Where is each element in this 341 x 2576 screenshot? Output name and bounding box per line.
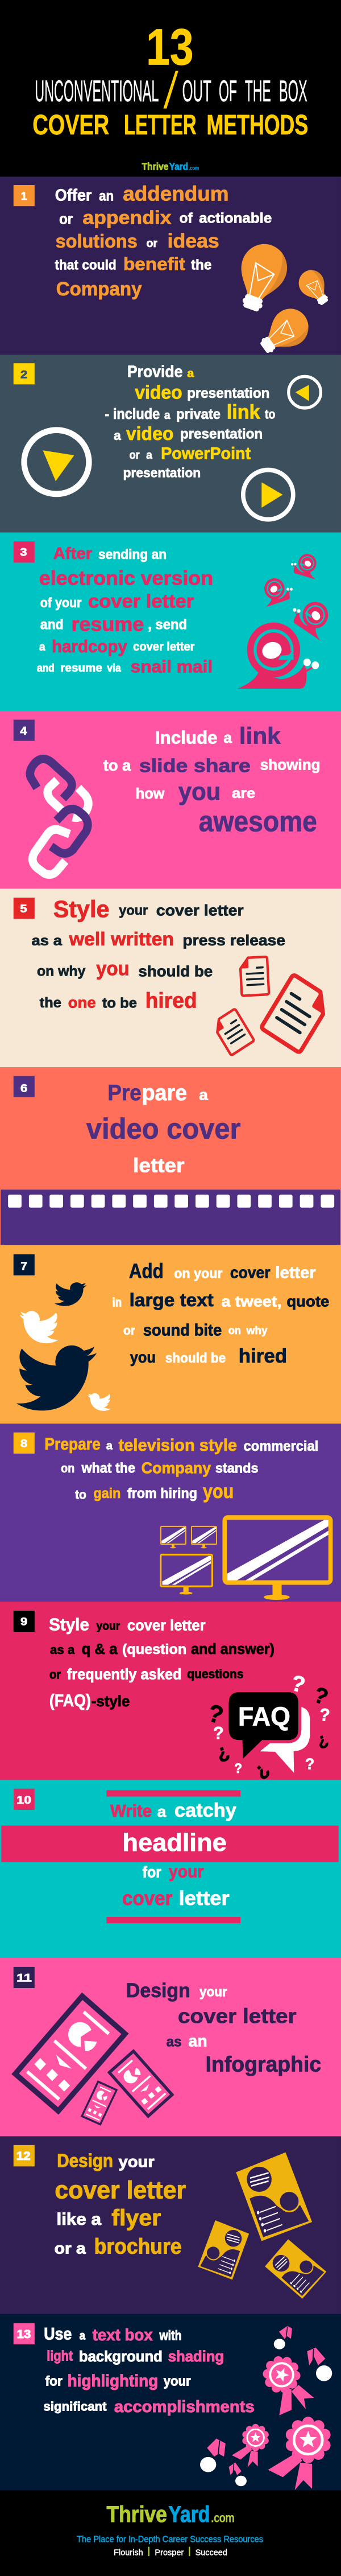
number badge 13 (14, 2323, 35, 2344)
text block 5: well written (69, 928, 174, 949)
text block 10: cover (122, 1888, 172, 1910)
title line: cover letter methods: METHODS (207, 109, 308, 141)
text block 10: headline (122, 1829, 227, 1857)
icon: medium television (161, 1554, 212, 1594)
icon: middle snail (287, 593, 336, 640)
text block 5: the (40, 995, 61, 1011)
text block 6: Pre (107, 1081, 142, 1105)
text block 6: video cover (86, 1113, 241, 1145)
text block 3 (37, 544, 213, 677)
icon: left flyer (197, 2220, 249, 2279)
text block 7: Add (129, 1260, 164, 1283)
text block 7: on your (174, 1266, 222, 1281)
title line: unconventional / out of the box: OUT (182, 75, 211, 108)
number badge 12 (14, 2145, 35, 2166)
title line: unconventional / out of the box: THE (245, 75, 271, 108)
bottom rule (106, 1917, 240, 1923)
icon: rosette large (268, 2417, 331, 2490)
text block 1: Offer (55, 186, 92, 204)
panel: header (0, 0, 341, 178)
text block 6: pare (142, 1081, 187, 1105)
icon: right flyer (259, 2231, 332, 2307)
text block 4: awesome (199, 805, 317, 838)
text block 1: an (99, 188, 114, 204)
number badge 10 (14, 1789, 35, 1810)
text block 4 (103, 722, 321, 838)
text block 5: hired (145, 988, 197, 1013)
text block 5: one (68, 995, 96, 1011)
text block 3: sending an (98, 546, 167, 562)
text block 5 (31, 896, 285, 1013)
text block 5: cover letter (156, 902, 244, 919)
text block 4: how (136, 786, 164, 802)
text block 3: resume (72, 614, 144, 635)
text block 8: on (61, 1460, 74, 1475)
header logo (142, 161, 199, 172)
icon: medium light bulb (253, 301, 315, 363)
text block 3: snail mail (131, 657, 213, 677)
text block 7: sound bite (143, 1321, 222, 1339)
text block 4: Include (155, 727, 218, 748)
text block 4: a (223, 730, 232, 746)
text block 8: to (75, 1487, 86, 1502)
text block 4: slide share (139, 755, 251, 776)
text block 11: as (167, 2034, 182, 2050)
title line: cover letter methods: COVER (32, 109, 109, 141)
icon: question marks: ? (305, 1755, 314, 1773)
icon: small document (240, 957, 269, 996)
panel: method 6 (0, 1067, 341, 1247)
header logo: Yard (169, 161, 188, 172)
text block 3: and (40, 617, 64, 633)
top rule (106, 1790, 240, 1797)
text block 13: Use (44, 2324, 72, 2343)
text block 13: accomplishments (114, 2398, 255, 2416)
number badge 9 (14, 1611, 35, 1632)
title line: cover letter methods (32, 109, 308, 141)
panel: method 7 (0, 1245, 341, 1425)
text block 9: (question (122, 1641, 186, 1657)
text block 2: a (187, 367, 194, 380)
text block 9: questions (187, 1666, 244, 1681)
text block 5: should be (138, 964, 213, 980)
text block 3: of your (40, 595, 81, 610)
text block 5: on why (37, 964, 86, 980)
text block 2: presentation (123, 466, 201, 480)
number badge 5: 5 (20, 903, 27, 915)
number badge 1 (14, 185, 35, 206)
number badge 13: 13 (16, 2328, 31, 2342)
panel: method 8 (0, 1423, 341, 1604)
text block 13: light (47, 2348, 73, 2364)
text block 3: , send (148, 617, 187, 633)
icon: question marks: ? (234, 1761, 242, 1776)
text block 7: why (246, 1324, 268, 1337)
text block 10: your (169, 1862, 204, 1882)
text block 13: for (45, 2374, 63, 2389)
text block 5: you (96, 958, 130, 980)
icon: question marks: ? (315, 1731, 331, 1752)
number badge 8: 8 (20, 1437, 27, 1450)
text block 8: commercial (244, 1439, 318, 1454)
icon: question marks: ? (319, 1705, 331, 1725)
text block 9 (49, 1615, 275, 1710)
text block 8: a (106, 1439, 113, 1452)
footer (0, 2490, 341, 2576)
text block 8: what the (81, 1460, 135, 1476)
text block 1: appendix (82, 207, 172, 228)
text block 7: quote (286, 1294, 329, 1310)
icon: medal 4 (229, 2463, 247, 2486)
number badge 6: 6 (20, 1082, 27, 1095)
icon: forward play button (243, 470, 293, 520)
text block 5: to be (102, 995, 137, 1011)
icon: left snail (259, 574, 296, 607)
icon: rosette small (232, 2424, 269, 2467)
text block 8 (44, 1435, 318, 1503)
text block 7: large text (130, 1289, 214, 1310)
text block 2: - include (105, 406, 160, 422)
text block 10: letter (179, 1887, 230, 1910)
icon: question marks: ? (251, 1759, 275, 1784)
text block 1: ideas (168, 230, 219, 252)
icon: top snail (289, 551, 321, 579)
number badge 5 (14, 898, 35, 919)
text block 3: a (39, 641, 45, 653)
text block 13: text box (93, 2326, 153, 2344)
icon: question marks: ? (289, 1670, 307, 1698)
text block 2: PowerPoint (161, 445, 251, 463)
text block 13: with (159, 2328, 182, 2343)
icon: question marks: ? (310, 1682, 331, 1710)
icon: question marks: ? (214, 1742, 232, 1767)
icon: question marks: ? (213, 1723, 224, 1743)
text block 7: cover (230, 1264, 271, 1282)
text block 7 (112, 1260, 329, 1367)
icon: medal 2 (307, 2348, 332, 2381)
text block 9: or (49, 1667, 61, 1681)
text block 13: background (79, 2348, 163, 2365)
icon: small light bulb (294, 265, 335, 311)
text block 12: Design (57, 2150, 113, 2171)
number badge 7: 7 (20, 1260, 27, 1273)
text block 5: your (119, 903, 148, 918)
text block 13 (44, 2324, 255, 2416)
text block 8: gain (94, 1486, 120, 1501)
text block 2: Provide (127, 363, 182, 381)
text block 9: (FAQ) (49, 1692, 91, 1710)
text block 1: that could (55, 257, 117, 273)
text block 8: television style (119, 1436, 237, 1455)
title line: unconventional / out of the box: UNCONVENTIONAL (35, 75, 159, 108)
text block 2: or (130, 449, 140, 462)
text block 10: Write (110, 1802, 152, 1821)
icon: large flyer (236, 2153, 312, 2241)
panel: method 4 (0, 711, 341, 891)
text block 6 (86, 1081, 241, 1177)
panel: method 11 (0, 1958, 341, 2138)
icon: medal 3 (200, 2438, 226, 2472)
number badge 3: 3 (20, 546, 27, 559)
footer logo: .com (211, 2512, 234, 2525)
text block 3: electronic version (39, 567, 213, 589)
title line: unconventional / out of the box: OF (219, 75, 237, 108)
text block 1: of (180, 211, 193, 227)
text block 13: significant (44, 2400, 107, 2414)
text block 12 (55, 2150, 186, 2259)
panel: method 13 (0, 2314, 341, 2493)
text block 7: on (228, 1324, 241, 1337)
text block 3: via (107, 662, 121, 674)
text block 12: or a (55, 2240, 86, 2257)
icon: chain links (30, 759, 88, 875)
icon: rosette upper (246, 2349, 325, 2426)
icon: large dark bird (16, 1345, 97, 1410)
text block 10 (110, 1800, 236, 1910)
text block 1: addendum (123, 182, 229, 205)
panel: method 9 (0, 1602, 341, 1784)
icon: FAQ speech bubbles: FAQ (238, 1701, 290, 1731)
footer logo: Thrive (106, 2502, 167, 2527)
number badge 11: 11 (16, 1972, 32, 1985)
icon: medium infographic sheet (105, 2048, 177, 2119)
text block 9: Style (49, 1615, 89, 1634)
text block 4: are (232, 785, 255, 801)
text block 7: in (112, 1295, 122, 1310)
number badge 7 (14, 1254, 35, 1275)
icon: white bird (19, 1311, 59, 1343)
text block 7: should be (165, 1350, 226, 1365)
text block 9: as a (50, 1643, 75, 1657)
text block 9: -style (92, 1693, 130, 1710)
text block 11: Design (126, 1980, 190, 2002)
text block 6: letter (133, 1154, 185, 1177)
number badge 12: 12 (16, 2150, 31, 2163)
number badge 4 (14, 720, 35, 741)
icon: small television right (192, 1526, 217, 1548)
icon: small white bird (88, 1393, 111, 1411)
number badge 9: 9 (20, 1615, 27, 1628)
text block 8: Prepare (44, 1435, 101, 1454)
text block 7: letter (275, 1264, 316, 1282)
text block 6: a (199, 1087, 209, 1103)
text block 4: to a (103, 756, 131, 774)
text block 11: Infographic (206, 2052, 321, 2076)
text block 12: flyer (111, 2205, 161, 2231)
motto: Succeed (196, 2548, 227, 2557)
text block 10: a (157, 1804, 167, 1820)
panel: method 10 (0, 1780, 341, 1960)
panel: header: BOX (279, 75, 307, 108)
headline band (1, 1826, 339, 1862)
text block 1: Company (56, 278, 142, 300)
motto: Prosper (155, 2548, 184, 2557)
icon: large light bulb (229, 238, 293, 317)
text block 11: an (188, 2032, 207, 2050)
title line: cover letter methods: LETTER (124, 109, 197, 141)
text block 2: a (114, 429, 121, 443)
text block 1: or (147, 237, 157, 250)
number badge 3 (14, 541, 35, 563)
text block 12: brochure (94, 2235, 182, 2259)
text block 7: hired (239, 1344, 287, 1367)
text block 2: video (135, 381, 182, 402)
icon: small infographic sheet (74, 2077, 124, 2129)
text block 3: resume (60, 662, 102, 674)
text block 1: benefit (123, 254, 185, 274)
text block 11: your (199, 1984, 227, 1999)
text block 12: cover letter (55, 2177, 186, 2204)
text block 5: as a (31, 933, 63, 949)
text block 2 (105, 363, 275, 480)
text block 2: a (146, 449, 153, 462)
title number: 13 (146, 18, 194, 76)
text block 9: cover letter (127, 1618, 206, 1633)
text block 4: you (178, 778, 221, 805)
text block 5: Style (53, 896, 109, 923)
text block 9: your (97, 1620, 120, 1633)
number badge 2 (14, 363, 35, 384)
header logo: Thrive (142, 161, 169, 172)
text block 12: like a (56, 2209, 101, 2229)
icon: medal 1 (274, 2326, 292, 2349)
text block 9: frequently asked (67, 1665, 182, 1683)
number badge 4: 4 (20, 725, 27, 738)
icon: large document (261, 974, 332, 1053)
icon: tilted document (212, 1009, 254, 1056)
text block 9: and answer) (191, 1641, 275, 1657)
text block 12: your (119, 2154, 155, 2171)
text block 10: for (143, 1863, 161, 1881)
header logo: .com (189, 165, 199, 172)
text block 8: you (203, 1481, 234, 1503)
icon: small television left (161, 1526, 186, 1548)
text block 8: stands (215, 1460, 259, 1476)
text block 7: you (130, 1348, 156, 1366)
icon: large snail (238, 626, 319, 689)
footer logo: Yard (169, 2502, 210, 2527)
text block 13: your (164, 2374, 191, 2389)
text block 2: video (126, 423, 173, 444)
text block 13: a (80, 2330, 85, 2343)
text block 7: or (123, 1323, 136, 1338)
text block 11 (126, 1980, 321, 2076)
number badge 1: 1 (21, 190, 27, 203)
tagline: The Place for In-Depth Career Success Resources (77, 2534, 263, 2544)
text block 3: hardcopy (52, 637, 127, 656)
icon: FAQ speech bubbles (227, 1690, 310, 1773)
text block 3: cover letter (88, 591, 194, 612)
number badge 6 (14, 1076, 35, 1097)
footer logo (106, 2502, 234, 2527)
icon: question marks (205, 1670, 331, 1784)
text block 5: press release (182, 933, 285, 949)
text block 13: shading (168, 2348, 224, 2365)
text block 2: to (265, 407, 275, 422)
icon: question marks: ? (205, 1699, 226, 1730)
text block 2: link (227, 401, 261, 423)
icon: large infographic sheet (15, 1996, 125, 2111)
text block 4: link (239, 722, 281, 749)
text block 1: or (59, 211, 73, 228)
text block 2: presentation (187, 386, 269, 401)
text block 8: Company (142, 1459, 211, 1477)
text block 7: a tweet, (222, 1293, 282, 1310)
panel: method 3 (0, 533, 341, 713)
text block 9: q & a (81, 1641, 118, 1657)
text block 2: a (164, 409, 170, 422)
icon: small dark bird (55, 1282, 86, 1306)
panel: method 1 (0, 176, 341, 363)
text block 1: the (191, 257, 211, 273)
number badge 11 (14, 1967, 35, 1988)
text block 3: After (53, 544, 92, 563)
motto (114, 2547, 227, 2557)
text block 4: showing (260, 757, 321, 773)
panel: method 12 (0, 2136, 341, 2318)
film strip (1, 1190, 340, 1245)
number badge 2: 2 (20, 368, 27, 381)
text block 8: from hiring (127, 1486, 197, 1501)
panel: method 5 (0, 888, 341, 1069)
panel: method 2 (0, 355, 341, 534)
icon: large television (224, 1517, 331, 1600)
text block 13: highlighting (68, 2371, 158, 2390)
text block 3: cover letter (133, 640, 194, 653)
number badge 10: 10 (16, 1794, 31, 1807)
text block 11: cover letter (178, 2005, 297, 2028)
icon: rewind button (289, 377, 321, 408)
motto: Flourish (114, 2548, 143, 2557)
text block 1 (55, 182, 272, 300)
text block 2: private (176, 407, 221, 422)
text block 1: actionable (199, 211, 272, 227)
text block 10: catchy (174, 1800, 236, 1821)
text block 2: presentation (180, 426, 263, 442)
text block 1: solutions (56, 230, 138, 252)
number badge 8 (14, 1433, 35, 1454)
text block 3: and (37, 662, 55, 674)
icon: large play button (24, 430, 89, 494)
